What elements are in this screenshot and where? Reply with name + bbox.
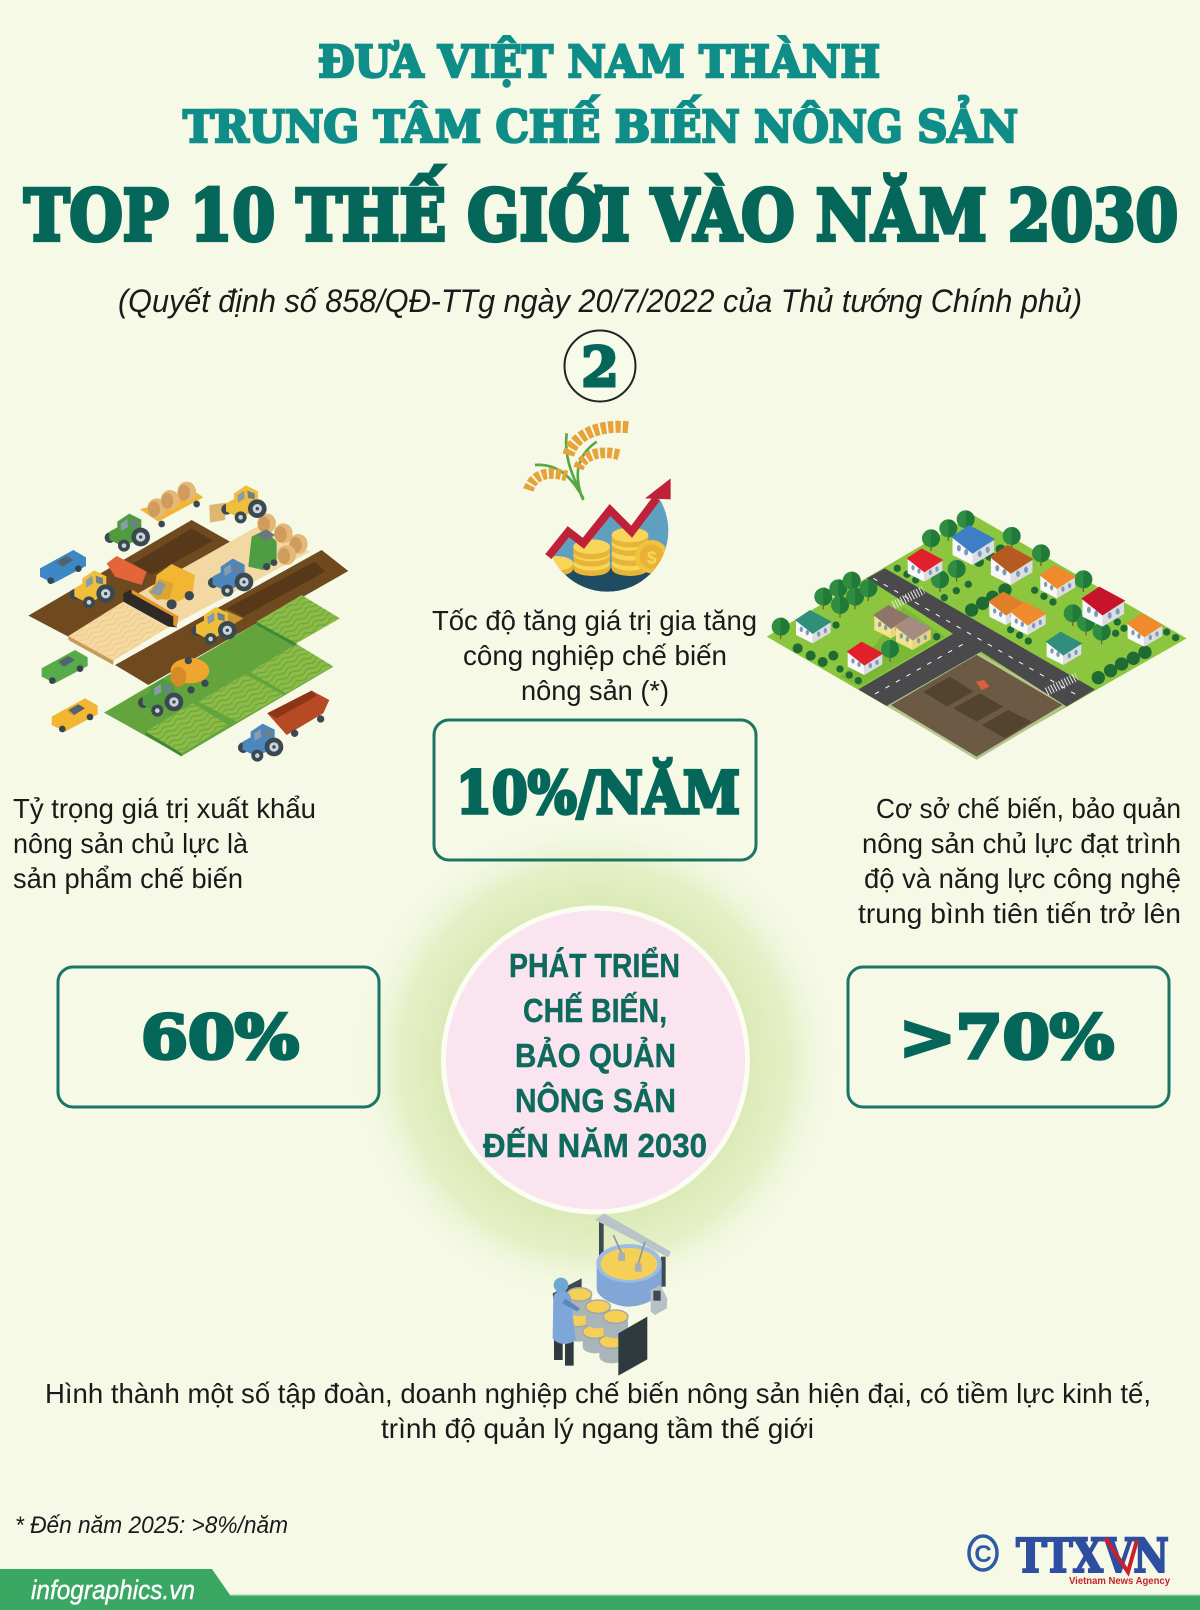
illustration: village xyxy=(767,510,1187,758)
text: right label: độ và năng lực công nghệ xyxy=(864,863,1181,894)
stat box: 60% xyxy=(58,967,379,1107)
text: left label: nông sản chủ lực là xyxy=(13,828,248,859)
stat box: >70%: >70% xyxy=(899,1003,1114,1073)
icon: coin chart xyxy=(545,478,671,592)
footer bar xyxy=(0,1569,1200,1610)
center circle: ĐẾN NĂM 2030 xyxy=(483,1127,707,1164)
text: bottom caption xyxy=(45,1378,1151,1444)
logo: TTXVN xyxy=(969,1529,1170,1587)
number badge xyxy=(564,330,636,402)
text: right label xyxy=(858,793,1181,929)
center glow xyxy=(350,815,840,1305)
footnote: * Đến năm 2025: >8%/năm xyxy=(15,1512,288,1539)
icon: rice stalks xyxy=(528,427,628,500)
text: center label: Tốc độ tăng giá trị gia tăng xyxy=(432,605,757,636)
number badge: 2 xyxy=(581,335,619,399)
stat box: 60%: 60% xyxy=(141,1003,299,1073)
logo: TTXVN: C xyxy=(974,1541,992,1568)
text: center label: công nghiệp chế biến xyxy=(463,640,727,671)
text: right label: Cơ sở chế biến, bảo quản xyxy=(876,793,1181,824)
center circle xyxy=(444,908,748,1212)
text: right label: nông sản chủ lực đạt trình xyxy=(862,828,1181,859)
center circle: BẢO QUẢN xyxy=(515,1037,676,1074)
title xyxy=(24,34,1178,257)
text: left label xyxy=(13,793,316,894)
stat box: 10%/năm: 10%/NĂM xyxy=(456,758,740,827)
illustration: farm xyxy=(28,482,348,762)
text: center label xyxy=(432,605,757,706)
icon: coin chart: $ xyxy=(647,547,657,567)
stat box: 10%/năm xyxy=(434,720,756,860)
logo: TTXVN: TTXVN xyxy=(1016,1529,1169,1584)
subtitle: (Quyết định số 858/QĐ-TTg ngày 20/7/2022 của Thủ tướng Chính phủ) xyxy=(118,283,1082,319)
text: bottom caption: Hình thành một số tập đoàn, doanh nghiệp chế biến nông sản hiện đại, có tiềm lực kinh tế, xyxy=(45,1378,1151,1409)
center circle: CHẾ BIẾN, xyxy=(523,992,667,1029)
text: left label: sản phẩm chế biến xyxy=(13,863,243,894)
illustration: processing worker xyxy=(553,1213,671,1376)
text: bottom caption: trình độ quản lý ngang tầm thế giới xyxy=(381,1413,814,1444)
title: ĐƯA VIỆT NAM THÀNH xyxy=(318,34,880,88)
text: right label: trung bình tiên tiến trở lên xyxy=(858,898,1181,929)
text: center label: nông sản (*) xyxy=(521,675,669,706)
logo: TTXVN: Vietnam News Agency xyxy=(1069,1576,1170,1587)
text: left label: Tỷ trọng giá trị xuất khẩu xyxy=(13,793,316,824)
center circle: NÔNG SẢN xyxy=(515,1081,676,1119)
center circle: PHÁT TRIỂN xyxy=(509,947,680,984)
title: TRUNG TÂM CHẾ BIẾN NÔNG SẢN xyxy=(183,94,1018,153)
stat box: >70% xyxy=(848,967,1169,1107)
illustration: wheat and rising coins xyxy=(528,427,677,598)
footer bar: infographics.vn xyxy=(31,1575,195,1605)
